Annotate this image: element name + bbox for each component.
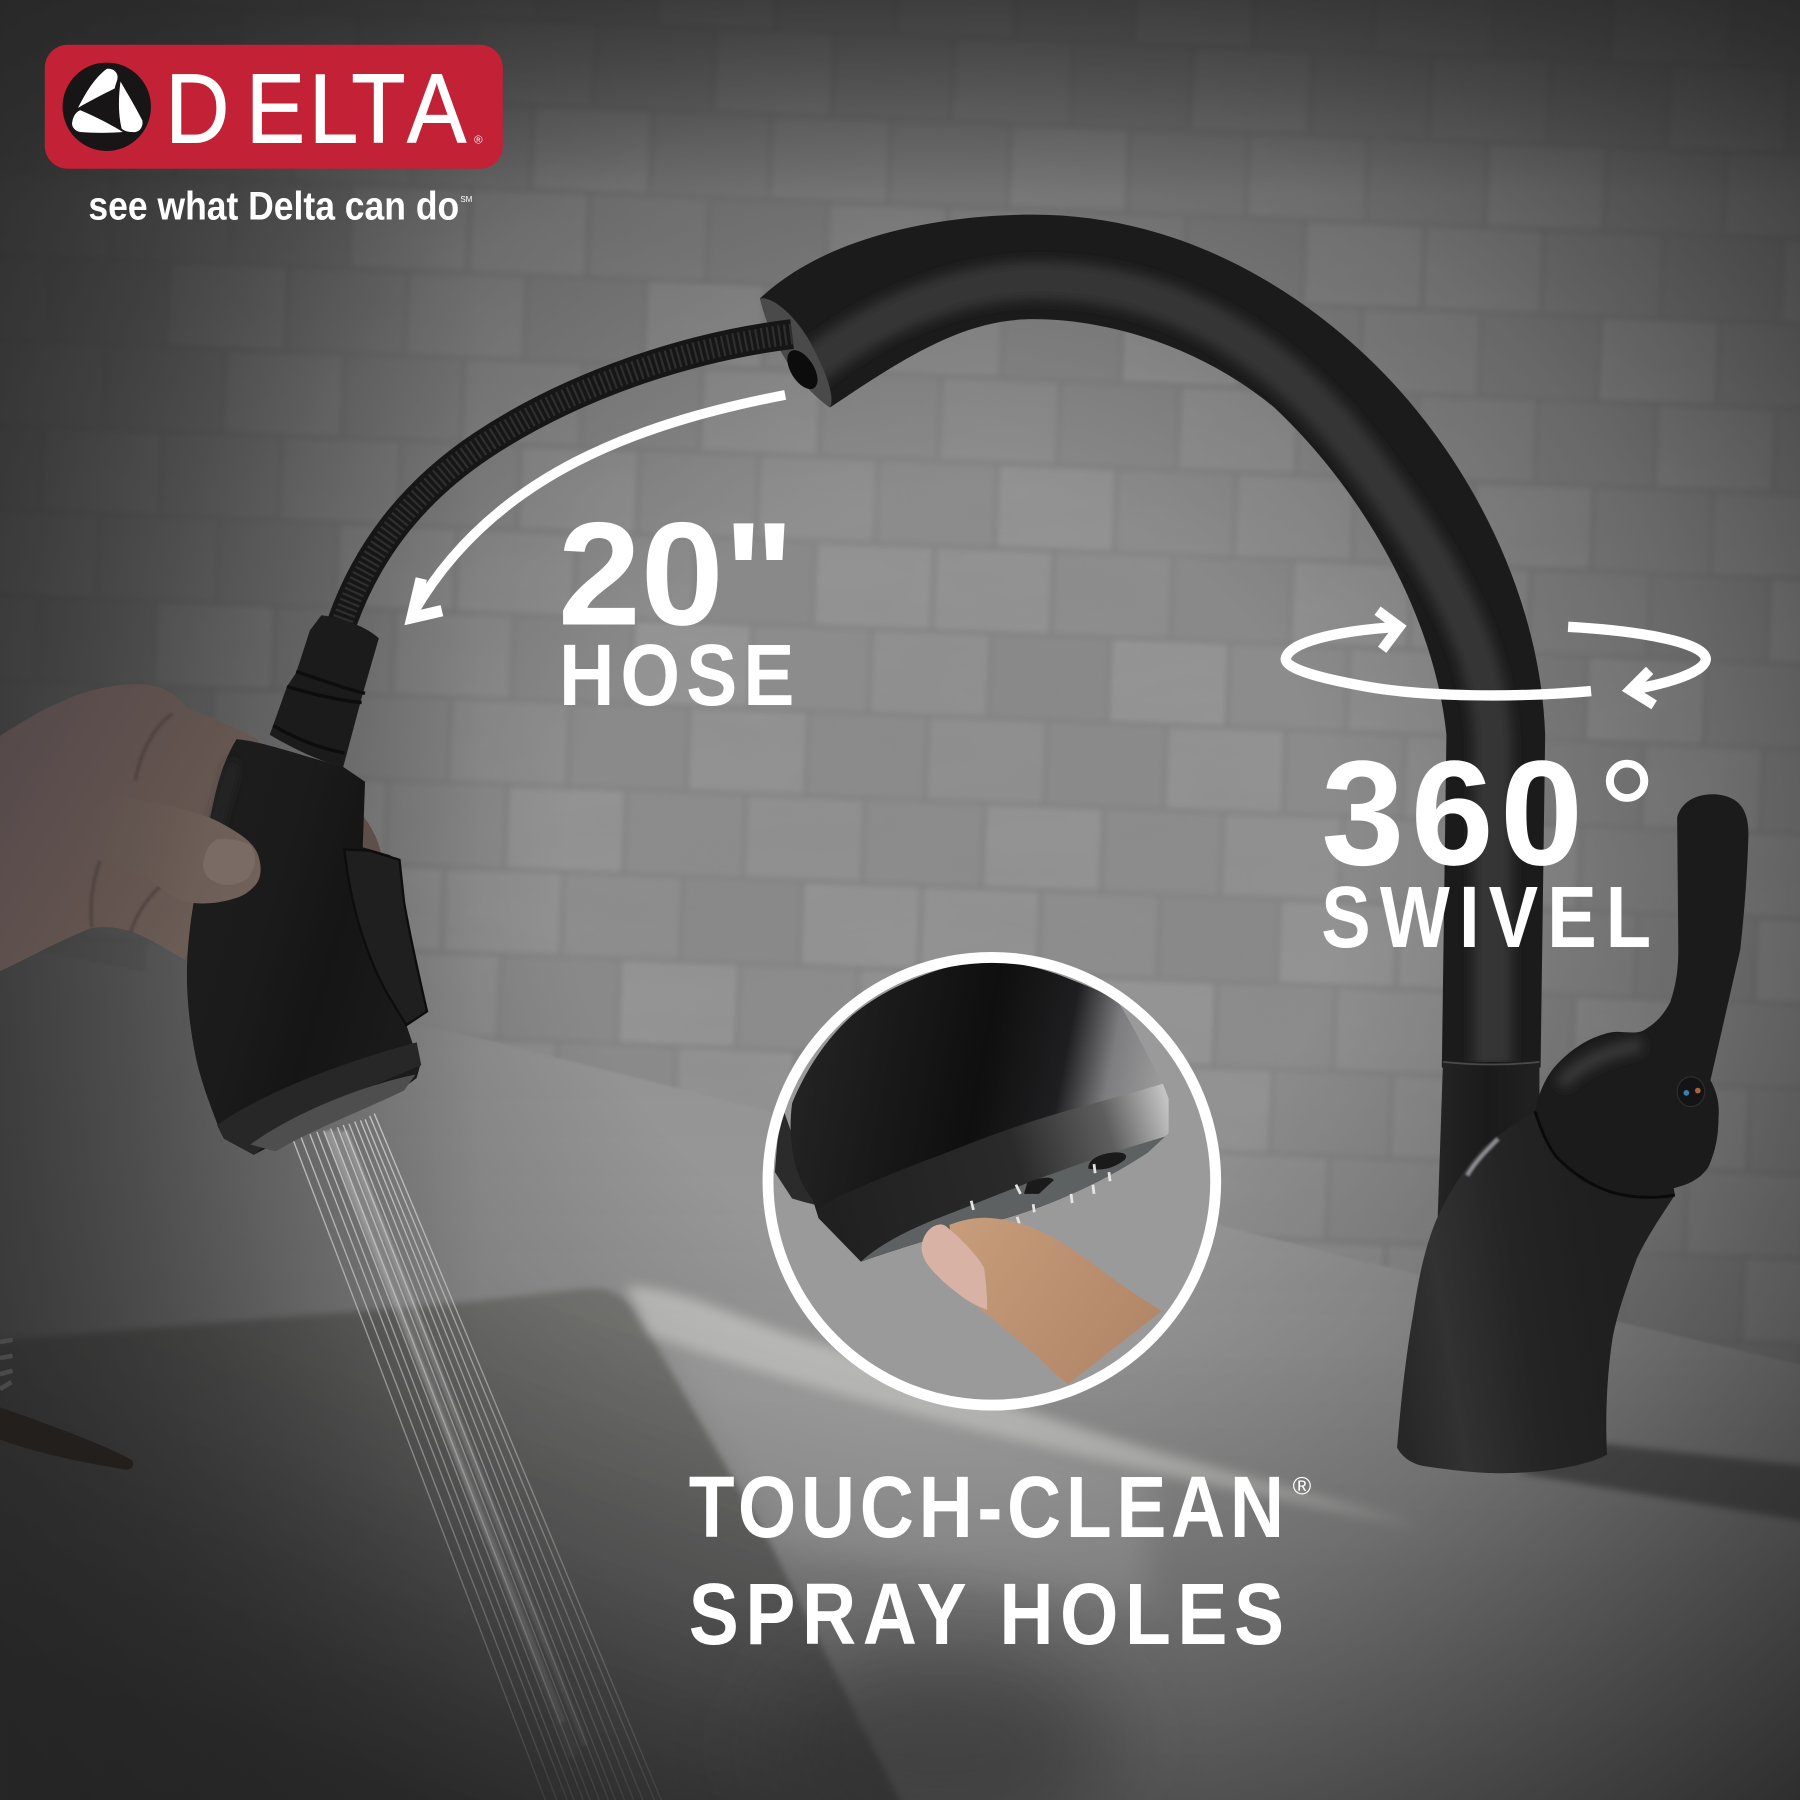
sink lower soft shadow	[769, 1642, 1114, 1800]
faucet spout	[760, 215, 1545, 1068]
callout: touch-clean spray holes: TOUCH-CLEAN	[689, 1459, 1284, 1556]
callout: touch-clean spray holes	[689, 1459, 1312, 1663]
nozzle button edge	[774, 1113, 814, 1205]
finger creases	[91, 714, 172, 932]
marble tile backsplash	[0, 0, 1800, 1378]
sink basin	[0, 1288, 918, 1800]
spout soft highlight	[804, 280, 1492, 1068]
swivel right arc	[1568, 627, 1706, 690]
knife	[0, 1407, 133, 1470]
fingernail	[922, 1224, 987, 1310]
body glint	[1467, 1139, 1498, 1176]
callout: 20 inch hose	[558, 492, 794, 724]
finger behind sprayer	[358, 810, 381, 854]
water spray	[293, 1114, 661, 1800]
arrow: hose length	[412, 395, 785, 618]
spout hole	[781, 345, 824, 394]
callout: touch-clean spray holes: ®	[1293, 1473, 1312, 1501]
inset ring	[768, 957, 1216, 1405]
nozzle band	[818, 1084, 1169, 1262]
rubber nubs	[971, 1164, 1110, 1224]
neck	[1437, 1062, 1539, 1231]
hose	[342, 334, 792, 622]
collar band	[217, 1042, 421, 1155]
spray face	[250, 1074, 416, 1151]
callout: 360 swivel	[1321, 729, 1657, 966]
palm and fingers	[0, 684, 259, 971]
spout opening ring	[760, 298, 831, 408]
spray button	[344, 849, 427, 1025]
finger	[949, 1218, 1162, 1384]
fork tines	[0, 1340, 13, 1389]
Delta logo	[45, 45, 503, 228]
registered mark: ®	[474, 134, 483, 146]
shadow of faucet base	[1516, 1444, 1800, 1527]
sprayer head	[187, 615, 427, 1155]
body highlight	[209, 763, 234, 861]
light band on sink rim	[626, 1286, 1423, 1527]
callout: 360 swivel: SWIVEL	[1321, 869, 1651, 966]
hub and handle	[1535, 794, 1748, 1196]
faucet base and handle	[1397, 794, 1748, 1473]
service mark: SM	[460, 195, 473, 204]
cutlery on the left edge	[0, 1340, 133, 1470]
indicator	[1677, 1077, 1705, 1107]
inset: touch-clean spray holes	[768, 957, 1216, 1405]
vignette: top	[0, 0, 1800, 195]
connector	[270, 615, 379, 767]
arrows: 360 degree swivel	[1286, 611, 1706, 705]
swivel left arc	[1286, 627, 1591, 695]
spray face	[861, 1136, 1165, 1262]
callout: 20 inch hose: 20"	[558, 492, 794, 656]
hand behind sprayer	[0, 684, 381, 971]
callout: 360 swivel: °	[1597, 730, 1657, 899]
swivel left head	[1378, 611, 1399, 650]
vignette: left	[0, 0, 482, 1800]
collar line	[1535, 1111, 1675, 1197]
callout: touch-clean spray holes: SPRAY HOLES	[689, 1566, 1284, 1663]
callout: 20 inch hose: HOSE	[559, 627, 794, 724]
nozzle body	[791, 962, 1169, 1262]
thumb over sprayer	[69, 797, 261, 903]
countertop	[0, 939, 1800, 1800]
logo badge	[45, 45, 503, 169]
tagline: see what Delta can do	[88, 183, 459, 228]
logo wordmark: DELTA	[165, 53, 467, 163]
lit sink far wall	[650, 1332, 1148, 1607]
inset backdrop	[768, 957, 1216, 1405]
spray holes	[1024, 1152, 1126, 1194]
logo emblem	[63, 63, 151, 151]
marble veining	[0, 0, 1800, 1378]
callout: 360 swivel: 360	[1321, 729, 1583, 896]
connector ridges	[273, 672, 365, 753]
swivel right head	[1630, 670, 1654, 705]
thumb nail	[203, 839, 255, 885]
sprayer body	[187, 739, 427, 1155]
hub highlight	[1561, 1045, 1642, 1085]
body	[1397, 1111, 1675, 1473]
neck joint line	[1443, 1062, 1539, 1064]
